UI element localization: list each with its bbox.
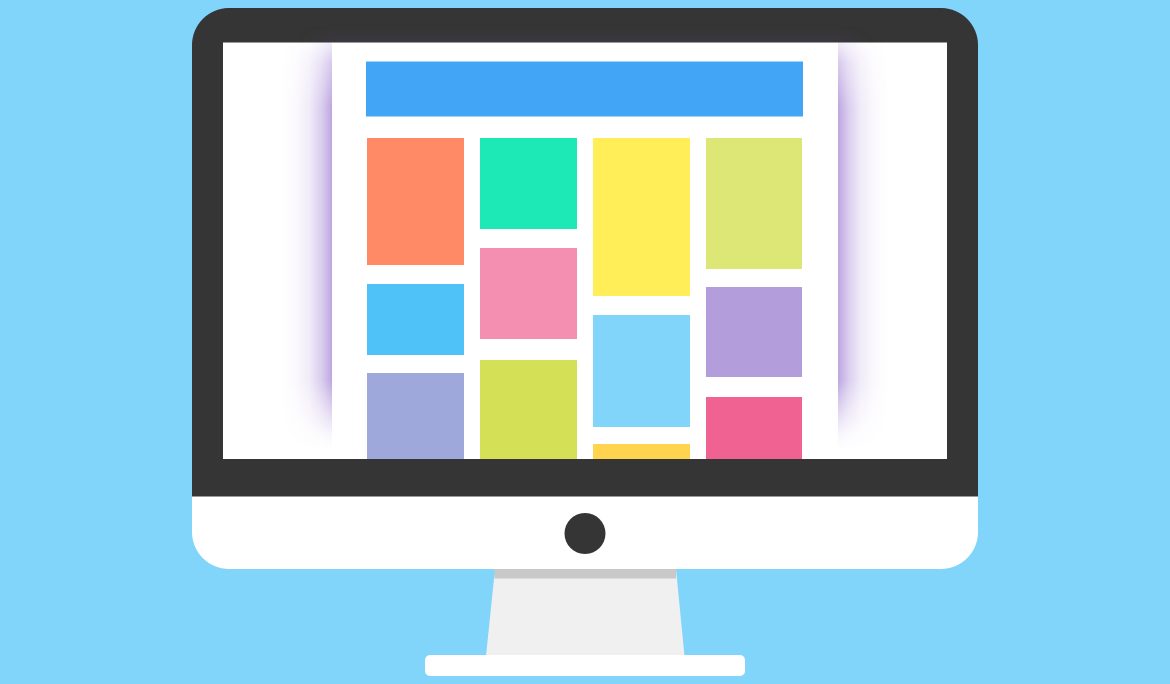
stand base (425, 655, 745, 676)
stand neck (486, 569, 684, 656)
column 4 tiles (706, 138, 802, 459)
monitor chin (192, 490, 978, 569)
bezel tint above page (320, 36, 850, 46)
illustration: desktop monitor showing masonry web page (192, 8, 978, 676)
screen background (223, 42, 947, 459)
column 1 tiles (367, 138, 464, 459)
power button (564, 513, 606, 554)
page shadow left (298, 42, 332, 437)
column 3 tiles (593, 138, 690, 459)
stand shadow (494, 569, 676, 578)
monitor bezel (192, 8, 978, 496)
monitor stand (425, 569, 745, 676)
header bar (366, 62, 803, 116)
screen (223, 42, 947, 459)
column 2 tiles (480, 138, 577, 459)
page shadow right (838, 42, 872, 437)
